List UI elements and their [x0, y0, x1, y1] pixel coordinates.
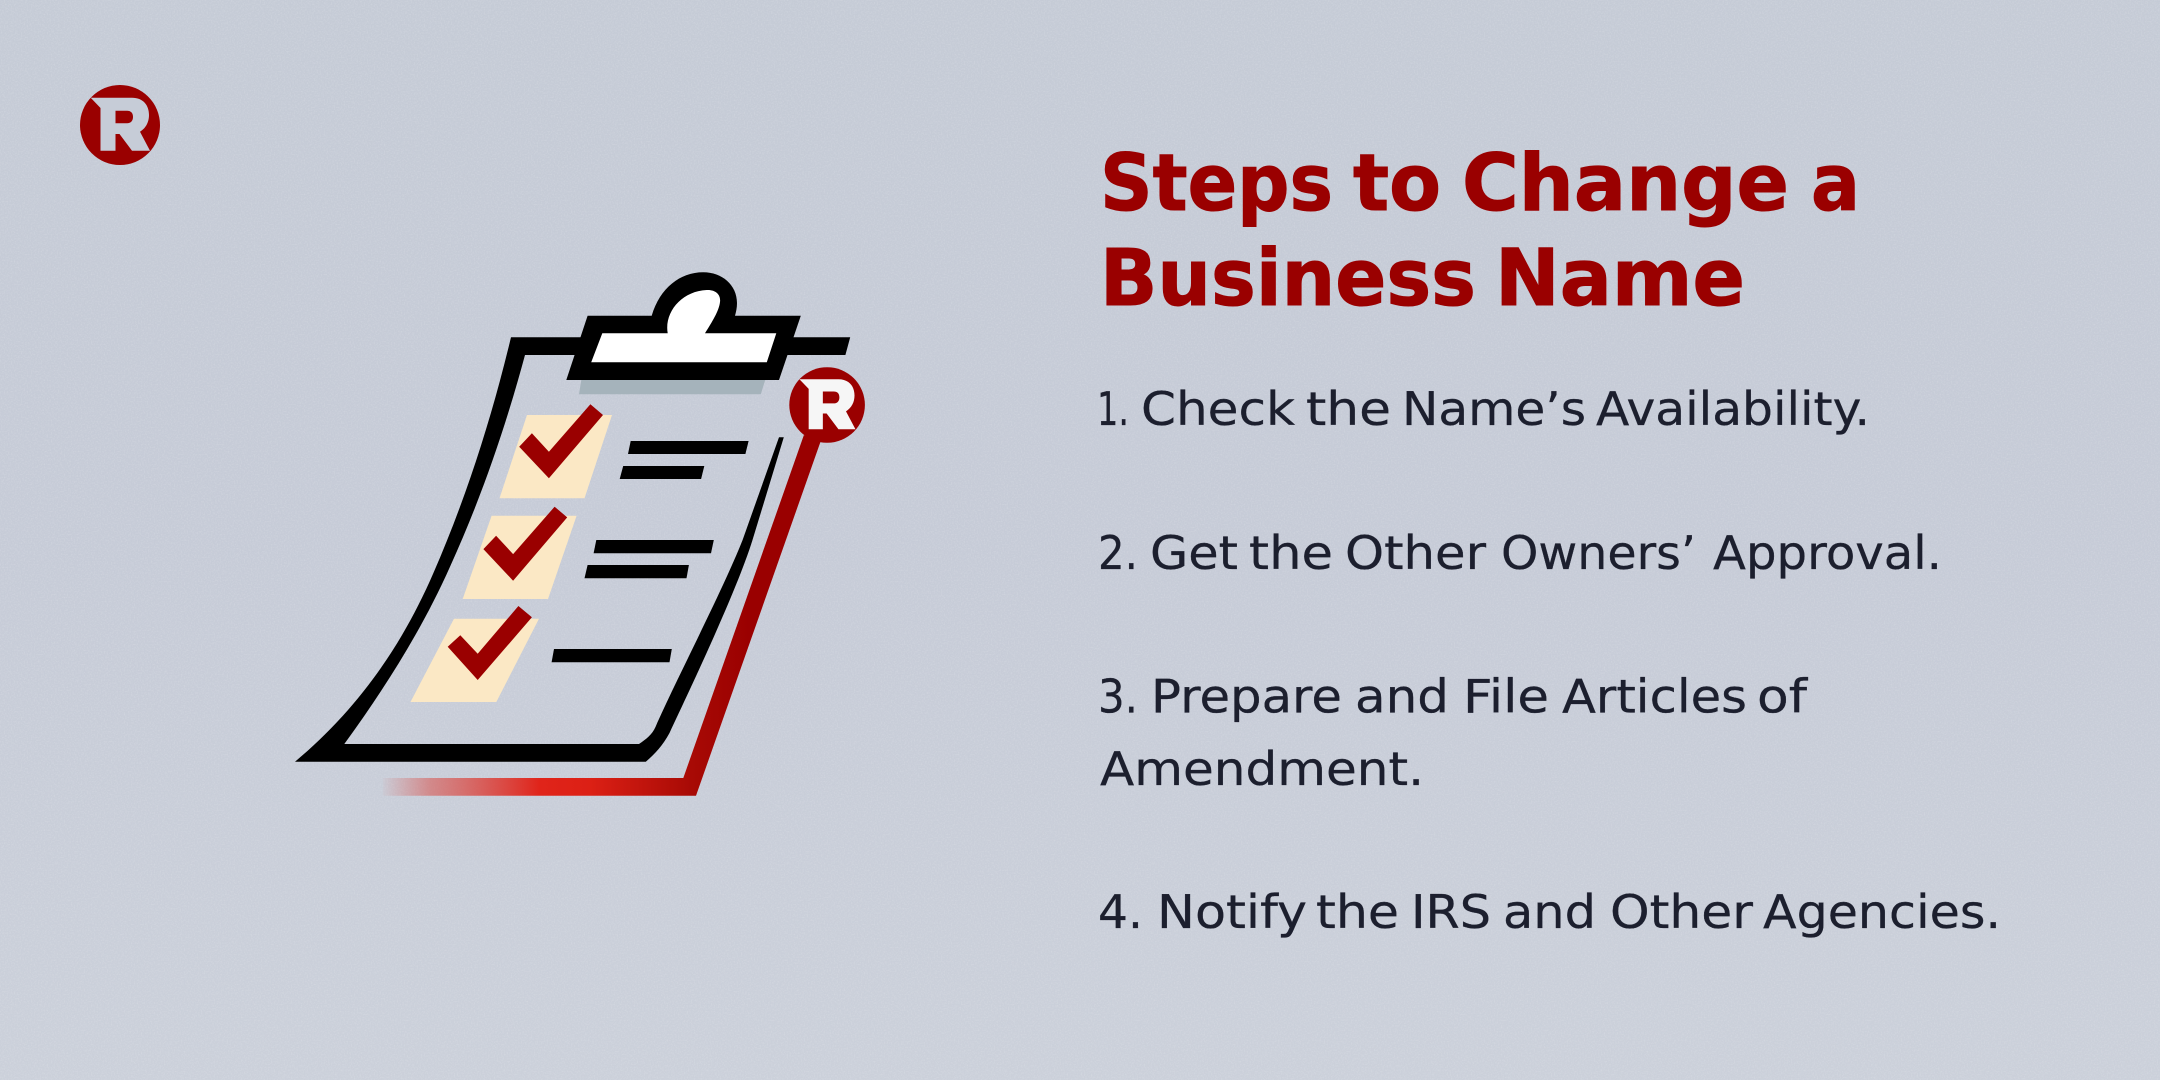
step 2: Get [1150, 526, 1238, 580]
step 4: Other [1610, 885, 1753, 939]
step 3: Articles [1562, 670, 1747, 724]
title: Steps [1100, 139, 1333, 229]
step 3: Amendment. [1100, 742, 1424, 796]
title: Change [1462, 139, 1789, 229]
checkbox 1 [500, 415, 612, 498]
paper outline [295, 337, 850, 762]
step 1: Availability. [1596, 382, 1870, 436]
step 2: the [1249, 526, 1333, 580]
checkbox 2 [463, 516, 577, 599]
clip body [566, 272, 801, 380]
step 2: Approval. [1713, 526, 1942, 580]
step 3: File [1463, 670, 1549, 724]
icon: clipboard checklist [295, 272, 865, 796]
step 4: 4. [1098, 885, 1143, 939]
checkbox 3 [410, 619, 539, 702]
title: Name [1495, 234, 1745, 324]
item 2 lines [584, 540, 714, 578]
step 4: Agencies. [1763, 885, 2001, 939]
step 2: Owners’ [1501, 526, 1696, 580]
step 3: of [1757, 670, 1809, 724]
item 3 line [552, 649, 672, 662]
step 3: and [1355, 670, 1449, 724]
step 3: Prepare [1151, 670, 1342, 724]
logo: top left R badge [80, 85, 160, 165]
title: Business [1100, 234, 1476, 324]
step 1: Name’s [1402, 382, 1586, 436]
title: a [1811, 139, 1860, 229]
clip highlight [591, 290, 776, 362]
step 1: Check [1141, 382, 1295, 436]
clip shadow [579, 380, 765, 394]
red backing sheet with fading edge [383, 435, 820, 796]
step 4: and [1503, 885, 1596, 939]
step 1: 1. [1097, 382, 1129, 436]
check mark 2 [483, 507, 567, 581]
step 2: Other [1345, 526, 1486, 580]
title: to [1353, 139, 1441, 229]
title [1100, 139, 1860, 324]
step list [1097, 382, 2001, 939]
step 2: 2. [1098, 526, 1138, 580]
step 1: the [1306, 382, 1391, 436]
check mark 1 [519, 404, 603, 478]
step 4: the [1316, 885, 1399, 939]
item 1 lines [620, 441, 749, 479]
step 3: 3. [1098, 670, 1138, 724]
step 4: Notify [1157, 885, 1307, 939]
step 4: IRS [1411, 885, 1491, 939]
check mark 3 [448, 606, 532, 680]
clipboard R badge [789, 367, 865, 443]
step 3 [1098, 670, 1809, 796]
